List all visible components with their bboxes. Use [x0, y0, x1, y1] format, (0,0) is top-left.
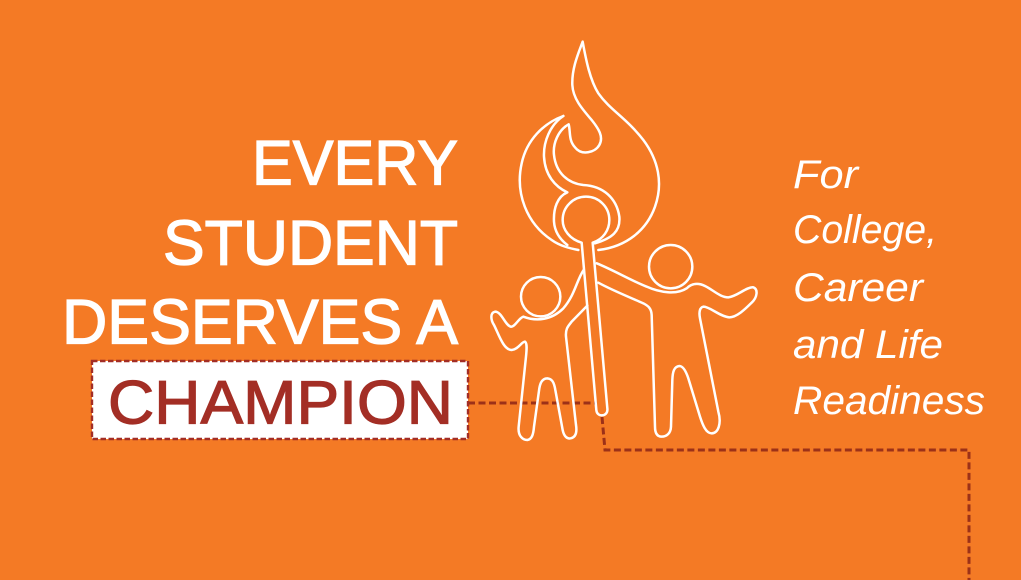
tagline: Career [793, 266, 925, 310]
icon: torch ring and handle [563, 197, 609, 415]
icon: torch flame [520, 42, 659, 250]
tagline: Readiness [793, 379, 985, 423]
tagline: For [793, 153, 860, 197]
dashed connector line [468, 403, 969, 580]
tagline [793, 153, 985, 423]
headline: DESERVES A [62, 288, 458, 358]
icon: child figure [491, 270, 587, 440]
icon: adult figure [597, 245, 757, 437]
headline: STUDENT [163, 208, 458, 278]
headline: EVERY [252, 128, 458, 198]
tagline: and Life [793, 323, 943, 367]
tagline: College, [793, 208, 937, 252]
headline [62, 128, 458, 358]
champion label box: CHAMPION [108, 368, 453, 436]
